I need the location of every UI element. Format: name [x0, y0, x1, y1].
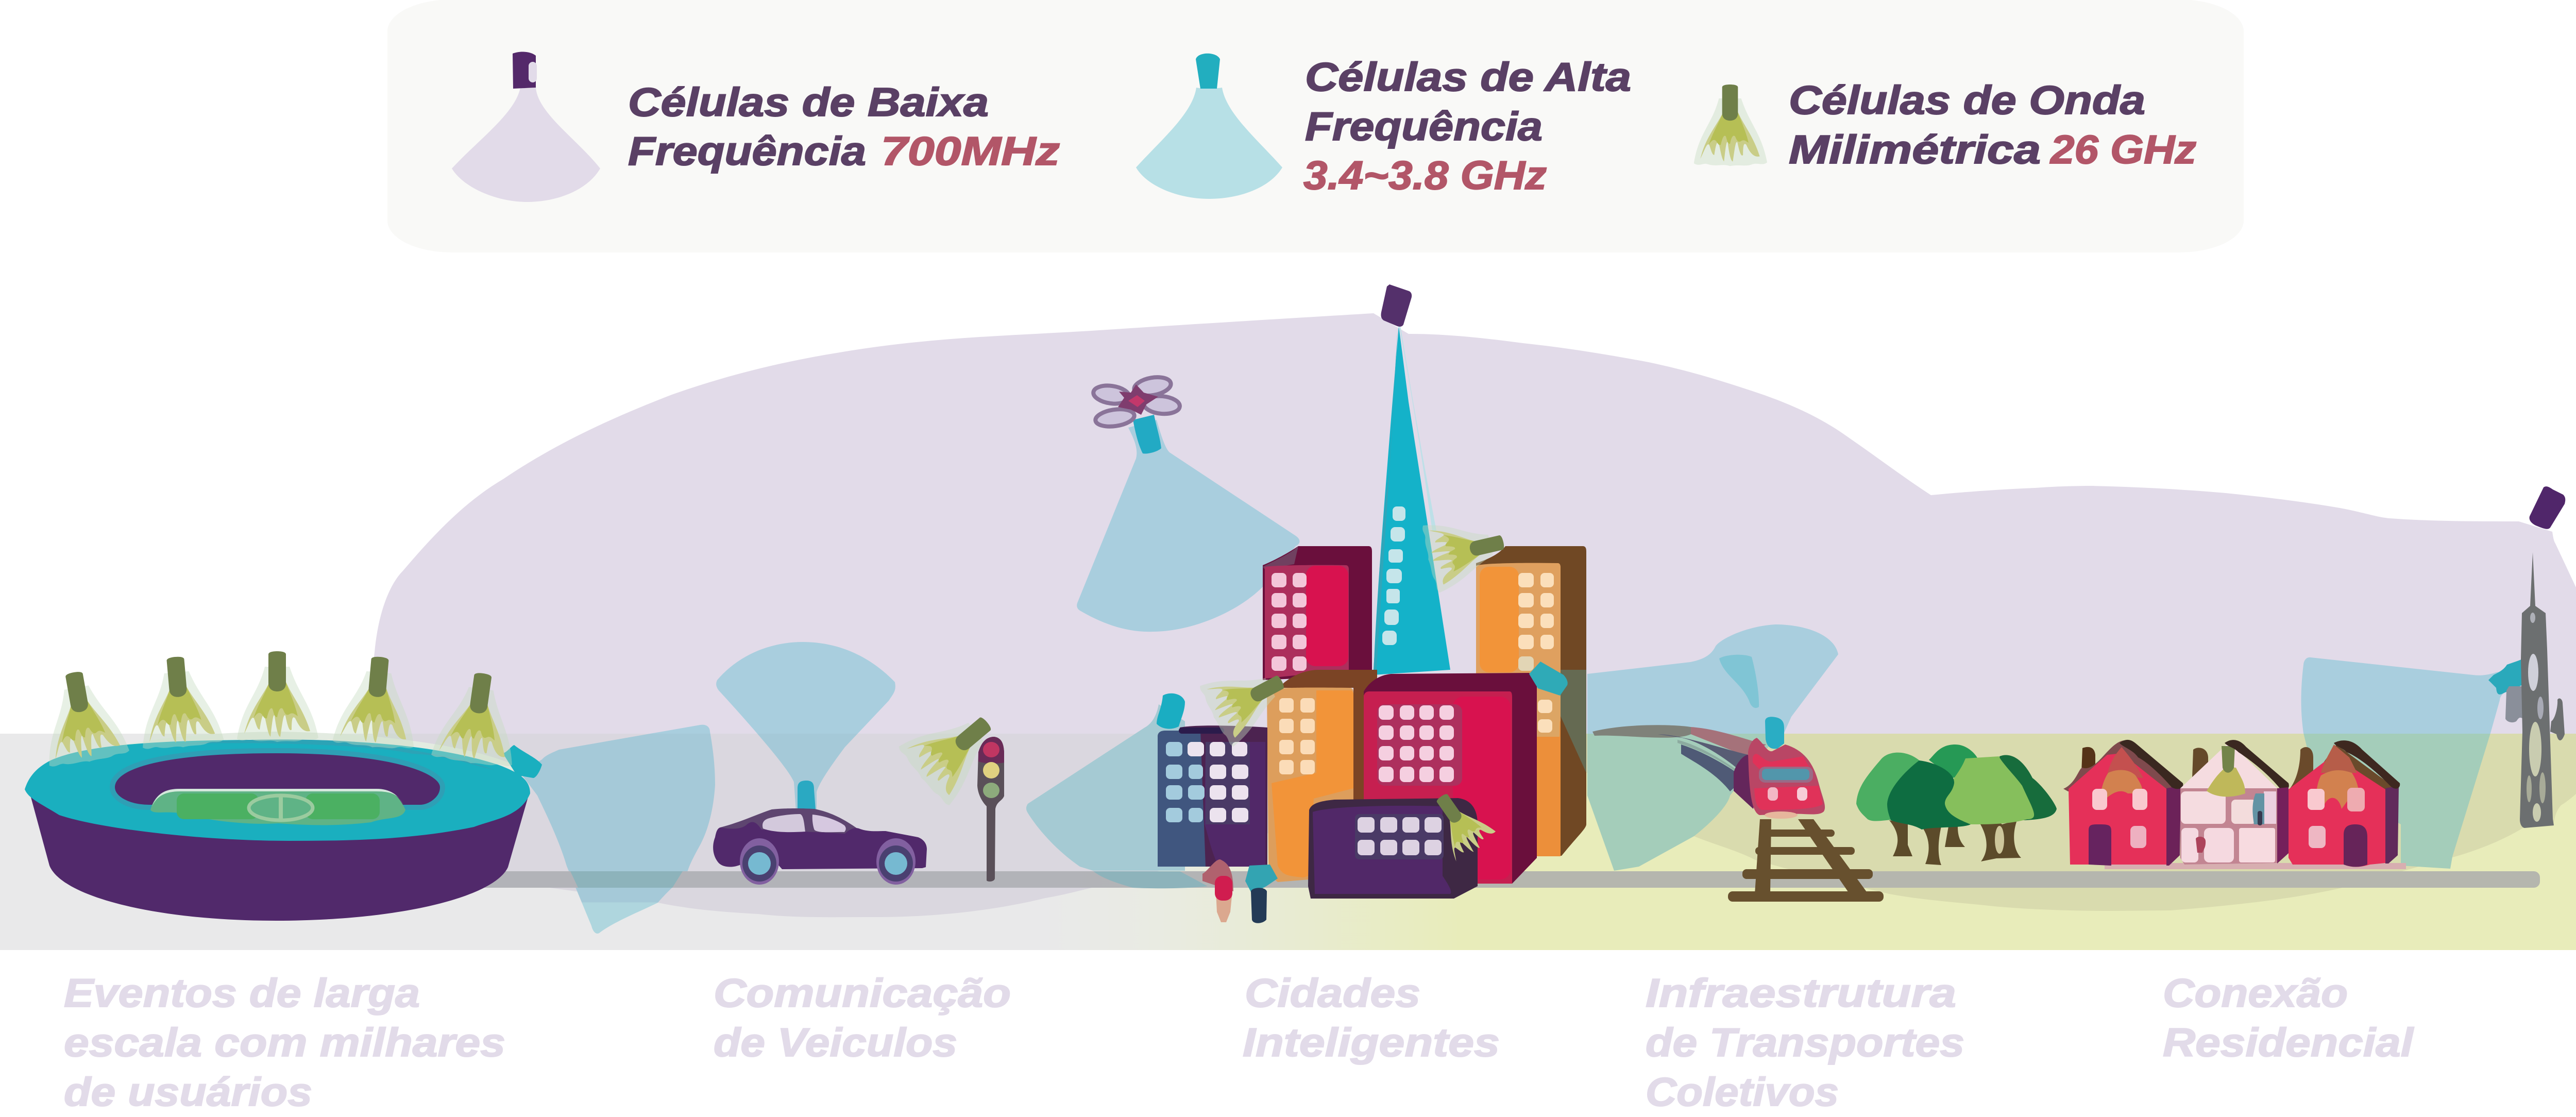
caption: large scale events: de usuários	[64, 1069, 312, 1114]
tower left arm	[2505, 686, 2523, 722]
houses	[2063, 740, 2406, 869]
house 3	[2289, 740, 2400, 867]
caption: public transport infrastructure: Infraestrutura	[1646, 970, 1956, 1016]
road	[464, 871, 2540, 888]
tower right arm	[2550, 699, 2565, 740]
beam: tower high frequency	[2301, 657, 2514, 869]
caption: vehicle communication: de Veiculos	[714, 1020, 957, 1065]
legend: high frequency label: Frequência	[1305, 104, 1543, 149]
tower mast	[2520, 552, 2554, 828]
antenna on purple building	[1421, 782, 1498, 864]
caption: public transport infrastructure	[1646, 970, 1964, 1114]
left building transmitter	[1157, 693, 1185, 729]
road under beams	[570, 871, 1208, 888]
train motion tail	[1592, 725, 1766, 791]
car wheels	[740, 838, 916, 885]
legend: high frequency label: Células de Alta	[1305, 54, 1631, 99]
spire top transmitter	[1381, 284, 1412, 327]
tower lattice openings	[2527, 613, 2546, 822]
tree trunks	[1889, 820, 2021, 865]
tree: dark green	[1887, 760, 1971, 830]
tower top transmitter	[2530, 486, 2565, 529]
legend: low frequency label: Frequência	[628, 128, 866, 174]
legend: millimetre wave label	[1789, 77, 2196, 172]
tree: back green	[1929, 744, 1979, 778]
section captions	[64, 970, 2414, 1114]
tower	[2488, 486, 2565, 828]
building: front orange	[1267, 670, 1377, 882]
legend: millimetre wave label: 26 GHz	[2049, 127, 2196, 172]
caption: smart cities: Cidades	[1245, 970, 1420, 1016]
stadium body	[30, 793, 529, 921]
caption: vehicle communication: Comunicação	[714, 970, 1011, 1016]
building: large red	[1364, 673, 1537, 884]
car transmitter	[798, 781, 816, 810]
drone rotors	[1092, 375, 1180, 429]
stadium ring shaded rim	[175, 739, 495, 770]
trunk highlight	[1995, 826, 2004, 854]
stadium inner bowl	[112, 751, 443, 807]
antenna on orange building	[1420, 509, 1511, 594]
house plinth	[2105, 863, 2406, 869]
house 2	[2180, 740, 2289, 865]
legend: millimetre wave label: Células de Onda	[1789, 77, 2145, 123]
train tracks	[1728, 819, 1884, 902]
car body	[713, 822, 927, 869]
legend: low frequency cells icon	[452, 52, 600, 202]
car	[713, 781, 927, 885]
beam: train high frequency	[1587, 624, 1838, 871]
person with red shirt	[1202, 859, 1233, 922]
building: low purple	[1308, 798, 1478, 899]
coverage area over ground	[377, 734, 2576, 917]
stadium millimetre wave halo	[28, 732, 520, 788]
person with teal shirt	[1245, 865, 1278, 923]
spire tower	[1374, 326, 1450, 675]
building: left blue and purple	[1158, 725, 1267, 867]
beam: drone high frequency	[1077, 420, 1299, 632]
train	[1592, 717, 1884, 902]
building: rear orange	[1476, 546, 1586, 856]
caption: smart cities: Inteligentes	[1243, 1020, 1500, 1065]
building: rear red	[1263, 546, 1372, 680]
caption: large scale events	[64, 970, 505, 1114]
tree: light green	[1945, 756, 2034, 824]
legend: low frequency label: Células de Baixa	[628, 79, 989, 125]
stadium ring	[25, 740, 530, 841]
caption: residential connection: Conexão	[2163, 970, 2348, 1016]
legend: millimetre wave label: Milimétrica	[1789, 127, 2041, 172]
caption: large scale events: escala com milhares	[64, 1020, 505, 1065]
low frequency coverage area	[373, 313, 2576, 917]
stadium scene	[25, 651, 542, 921]
car windows	[762, 814, 846, 832]
house 1	[2063, 740, 2183, 866]
legend: millimetre wave cells icon	[1694, 84, 1767, 166]
beam: inner train overlap	[1719, 655, 1759, 708]
legend panel	[387, 0, 2244, 252]
city	[1157, 284, 1586, 923]
tower transmitter	[2488, 659, 2523, 695]
building transmitter	[1529, 662, 1568, 696]
legend: low frequency label	[628, 79, 1060, 174]
beam: car high frequency	[716, 642, 895, 811]
legend: high frequency cells icon	[1136, 54, 1282, 199]
stadium transmitter	[503, 745, 542, 788]
caption: large scale events: Eventos de larga	[64, 970, 420, 1016]
caption: residential connection	[2163, 970, 2414, 1065]
drone body	[1118, 384, 1158, 415]
train body	[1734, 738, 1825, 819]
traffic light	[896, 693, 1012, 882]
ground band	[0, 734, 2576, 950]
beam: small cell by building	[1026, 704, 1185, 871]
traffic light housing	[977, 737, 1004, 882]
car roof	[720, 808, 859, 840]
tree: far right dark	[1999, 755, 2057, 820]
drone transmitter	[1133, 415, 1161, 454]
people	[1202, 859, 1278, 923]
caption: residential connection: Residencial	[2163, 1020, 2414, 1065]
caption: smart cities	[1243, 970, 1500, 1065]
traffic light antenna	[896, 693, 1012, 808]
caption: vehicle communication	[714, 970, 1011, 1065]
caption: public transport infrastructure: de Transportes	[1646, 1020, 1964, 1065]
antenna on left orange building	[1198, 651, 1298, 748]
train transmitter	[1765, 717, 1784, 749]
caption: public transport infrastructure: Coletivos	[1646, 1069, 1839, 1114]
beam: stadium high frequency	[520, 725, 715, 934]
trees	[1856, 744, 2057, 865]
drone	[1092, 375, 1180, 454]
stadium antennas	[34, 651, 524, 769]
legend: high frequency label	[1303, 54, 1631, 198]
tree: left mid green	[1856, 753, 1922, 821]
legend: high frequency label: 3.4~3.8 GHz	[1303, 153, 1547, 198]
stadium pitch	[150, 789, 405, 825]
legend: low frequency label: 700MHz	[881, 128, 1060, 174]
traffic light lamps	[983, 742, 999, 798]
